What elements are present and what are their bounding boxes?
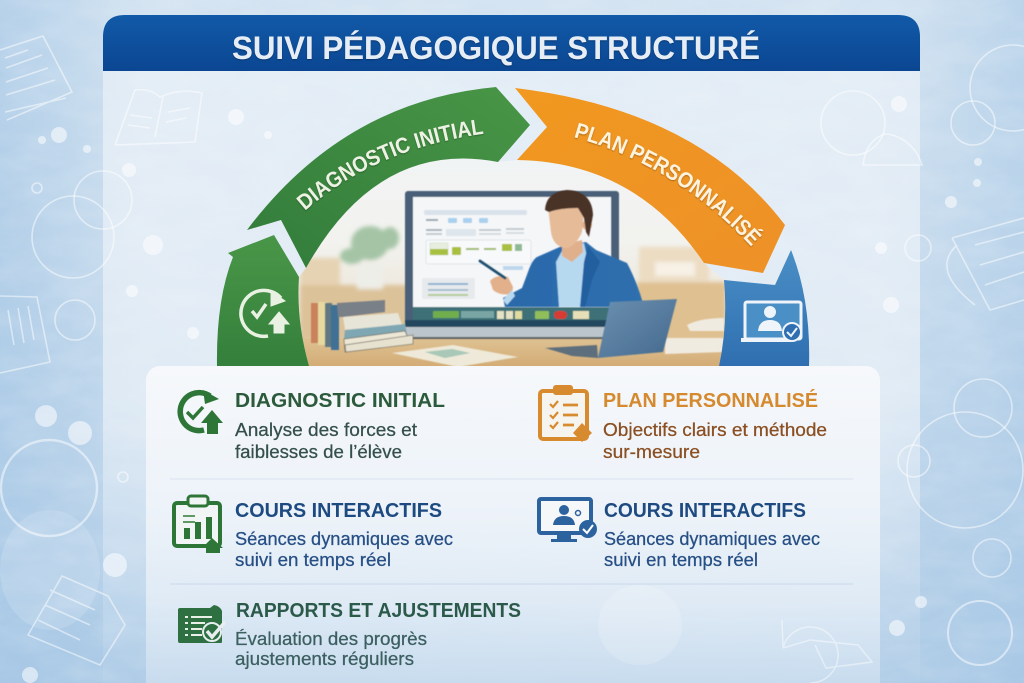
description: Séances dynamiques avec — [604, 529, 820, 549]
heading: COURS INTERACTIFS — [604, 500, 806, 522]
description: sur-mesure — [603, 442, 700, 462]
laptop — [545, 299, 677, 358]
details panel — [146, 366, 880, 683]
title: SUIVI PÉDAGOGIQUE STRUCTURÉ — [232, 30, 760, 66]
heading: RAPPORTS ET AJUSTEMENTS — [236, 600, 521, 622]
description: Objectifs clairs et méthode — [603, 420, 827, 440]
description: Analyse des forces et — [235, 420, 417, 440]
blurred room background — [300, 226, 726, 342]
teacher — [480, 190, 643, 307]
paper on desk — [392, 345, 518, 367]
icon: checklist clipboard — [540, 385, 592, 442]
monitor — [405, 191, 619, 339]
books — [311, 300, 413, 352]
item: diagnostic initial — [180, 390, 445, 462]
item: cours interactifs, right — [539, 499, 820, 570]
icon: chart clipboard — [174, 496, 223, 553]
side papers — [665, 318, 724, 354]
description: faiblesses de l’élève — [235, 442, 402, 462]
icon: video lesson monitor — [741, 302, 801, 342]
description: Évaluation des progrès — [235, 629, 427, 649]
arrow label: DIAGNOSTIC INITIAL — [296, 120, 484, 211]
item: plan personnalisé — [540, 385, 827, 462]
icon: presenter monitor — [539, 499, 597, 542]
photo scene: teacher at desk — [298, 158, 726, 366]
description: ajustements réguliers — [235, 649, 414, 669]
description: suivi en temps réel — [235, 550, 391, 570]
arrow: diagnostic initial — [247, 87, 530, 268]
description: suivi en temps réel — [604, 550, 758, 570]
heading: DIAGNOSTIC INITIAL — [235, 390, 445, 412]
item: rapports et ajustements — [178, 600, 521, 669]
heading: PLAN PERSONNALISÉ — [603, 389, 818, 412]
desk — [290, 338, 730, 366]
description: Séances dynamiques avec — [235, 529, 453, 549]
arrow label: PLAN PERSONNALISÉ — [574, 122, 764, 248]
icon: cycle check — [180, 390, 223, 434]
item: cours interactifs, left — [174, 496, 453, 570]
arrow: plan personnalisé — [515, 88, 785, 273]
icon: cycle with check — [241, 290, 289, 336]
icon: report with check — [178, 605, 225, 643]
wall — [298, 158, 725, 365]
heading: COURS INTERACTIFS — [235, 500, 442, 522]
arrow: lower right blue segment — [719, 250, 809, 366]
arrow: lower left green segment — [217, 235, 309, 366]
header banner — [103, 15, 920, 71]
main card — [103, 60, 920, 683]
